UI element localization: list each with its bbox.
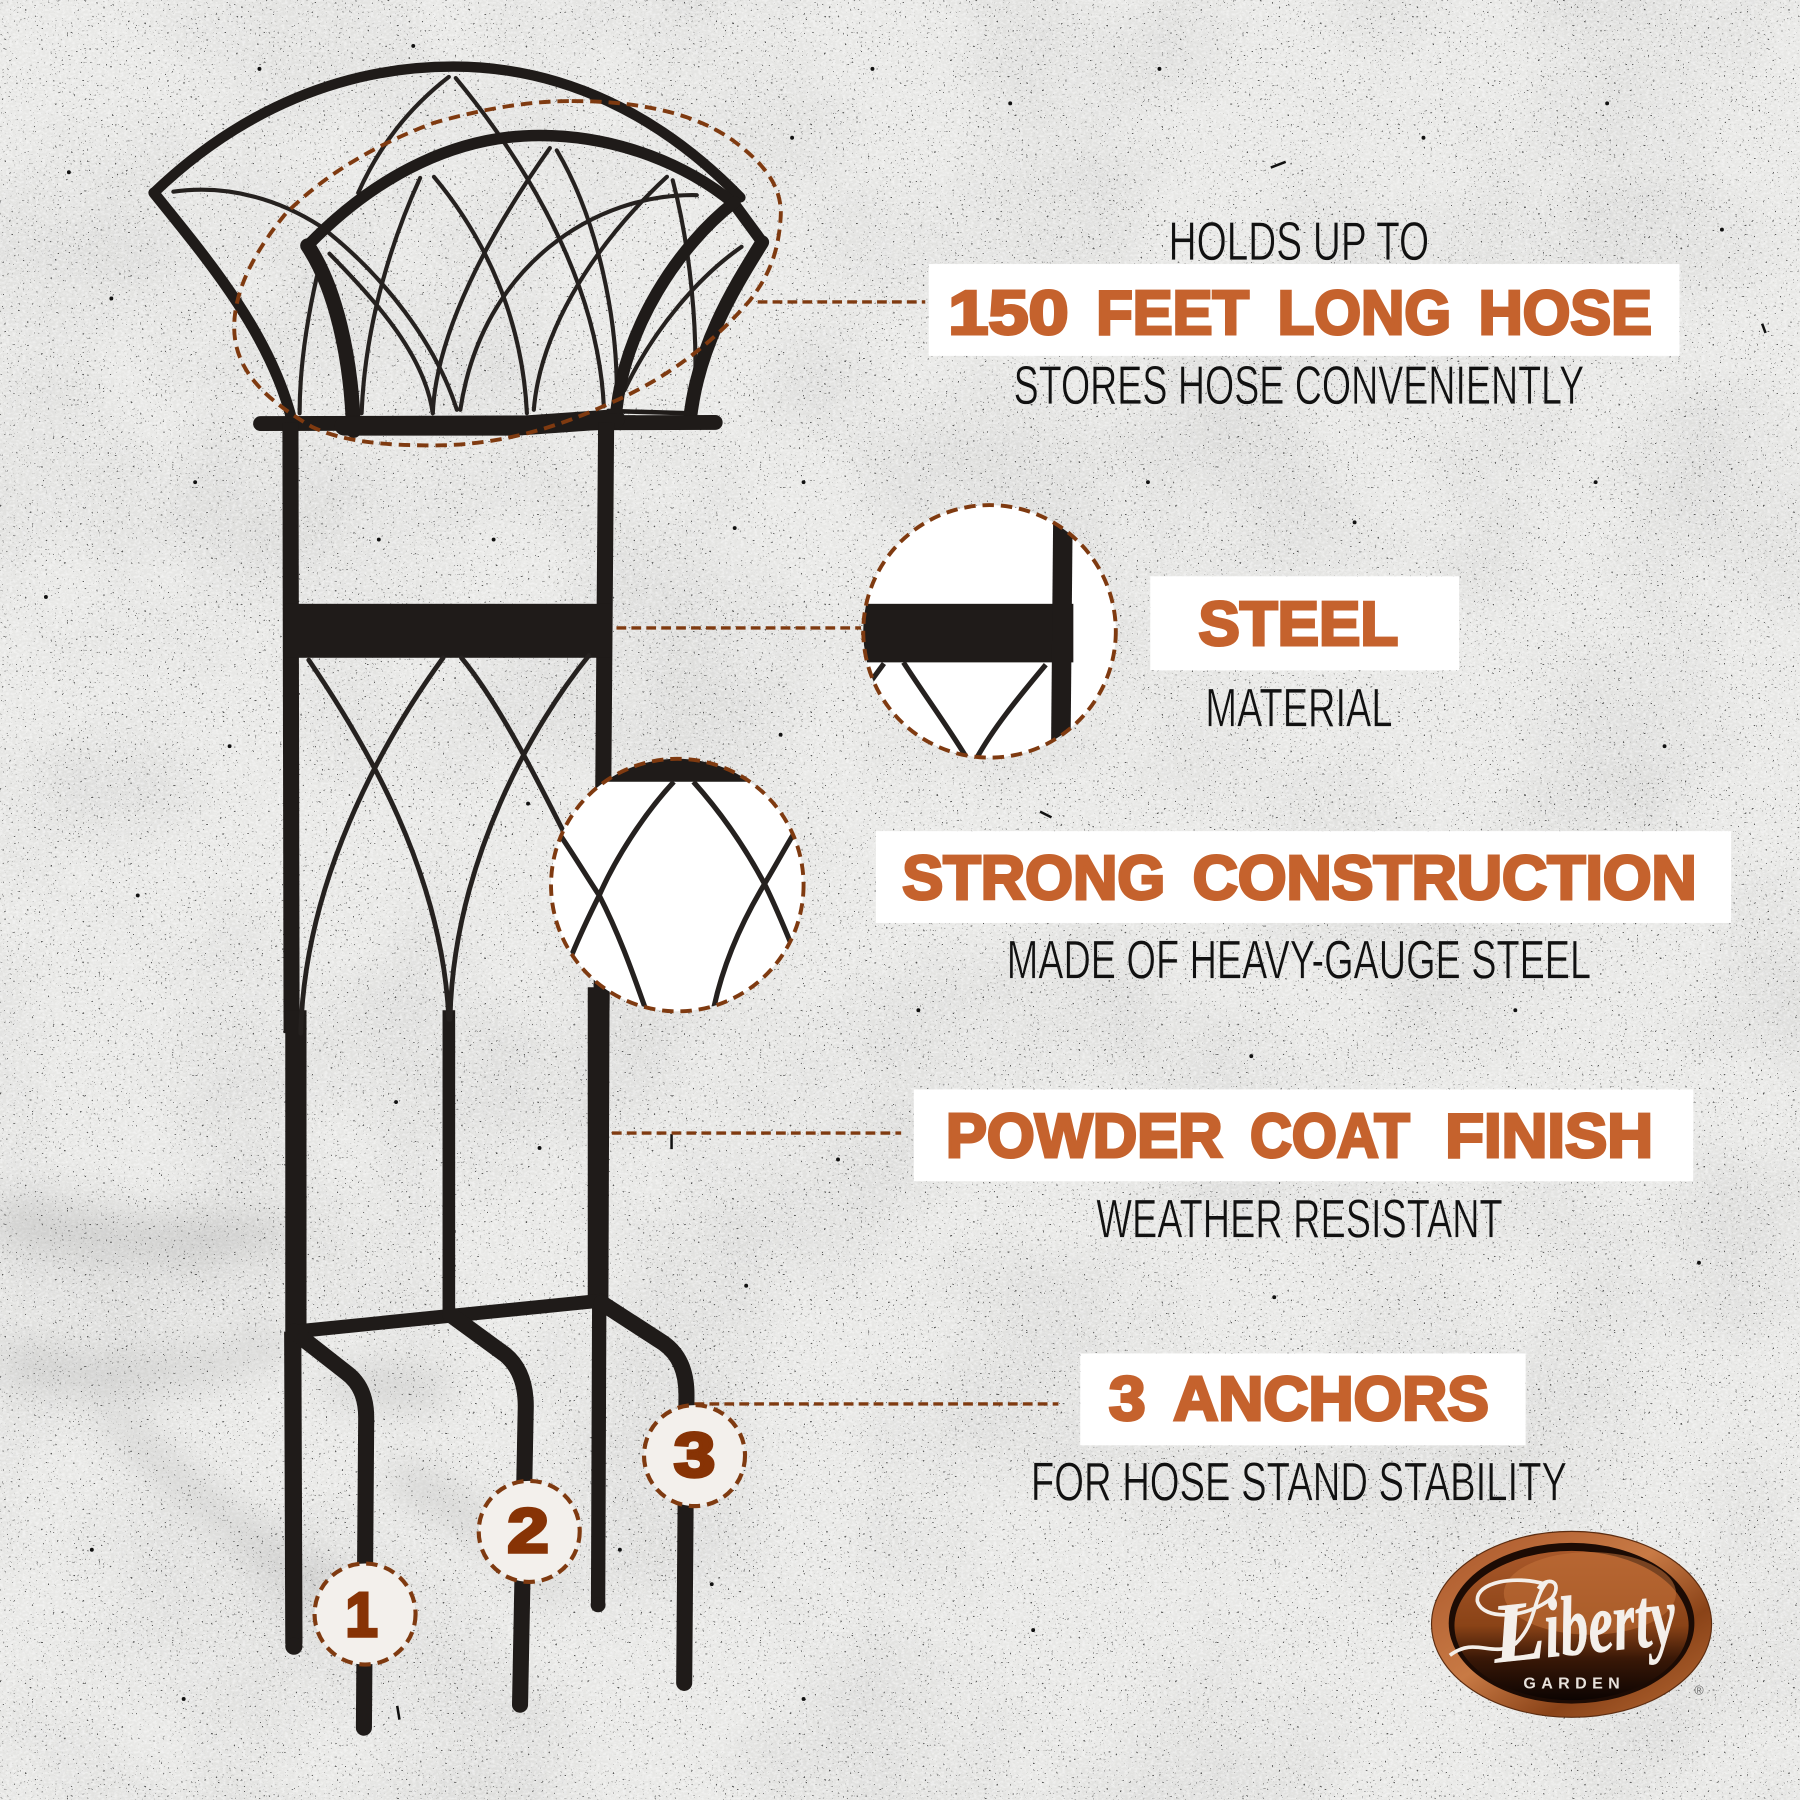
stand: basket frame	[154, 67, 762, 430]
feature: steel material: MATERIAL	[1205, 677, 1392, 739]
feature: strong construction: CONSTRUCTION	[1193, 844, 1697, 913]
anchor badge 3	[644, 1405, 745, 1506]
feature: powder coat finish: FINISH	[1445, 1102, 1653, 1171]
feature: hose capacity: HOSE	[1479, 279, 1652, 348]
feature: hose capacity: LONG	[1278, 279, 1451, 348]
feature: three anchors	[1031, 1353, 1567, 1512]
feature: powder coat finish: COAT	[1250, 1102, 1410, 1171]
stand: post tips	[285, 1597, 606, 1655]
connector: anchor to anchors label	[695, 1402, 1058, 1405]
feature: three anchors: 3	[1109, 1365, 1146, 1434]
logo: Liberty Garden: Liberty	[1486, 1569, 1680, 1682]
anchor badge 3: 3	[674, 1421, 715, 1490]
zoom circle: construction detail	[551, 752, 804, 1011]
stand: rail and anchors	[294, 1301, 686, 1728]
anchor badge 2	[479, 1481, 580, 1582]
feature: steel material	[1150, 576, 1459, 739]
feature: powder coat finish: POWDER	[946, 1102, 1223, 1171]
feature: three anchors: ANCHORS	[1173, 1365, 1489, 1434]
feature: steel material: STEEL	[1198, 590, 1398, 659]
feature: powder coat finish	[914, 1089, 1693, 1250]
logo: Liberty Garden: GARDEN	[1523, 1675, 1620, 1693]
dashed highlight around basket	[234, 101, 781, 445]
connector: post to finish label	[612, 1132, 901, 1135]
hose stand: product illustration	[154, 67, 762, 1728]
feature: hose capacity: FEET	[1096, 279, 1249, 348]
logo: Liberty Garden	[1432, 1531, 1712, 1717]
anchor badge 1: 1	[346, 1581, 378, 1650]
feature: hose capacity: HOLDS UP TO	[1169, 210, 1429, 272]
connector: plate to zoom circle	[616, 626, 861, 629]
feature: hose capacity	[929, 210, 1679, 416]
feature: powder coat finish: WEATHER RESISTANT	[1096, 1188, 1503, 1250]
connector: basket to capacity label	[758, 300, 925, 303]
feature: three anchors: FOR HOSE STAND STABILITY	[1031, 1450, 1567, 1512]
stand: basket head wires	[173, 77, 742, 413]
stand: posts and plate	[285, 422, 612, 1644]
stand: lower lattice	[301, 655, 602, 1033]
feature: strong construction: STRONG	[902, 844, 1165, 913]
anchor badge 2: 2	[507, 1497, 549, 1566]
logo: Liberty Garden: ®	[1694, 1683, 1704, 1697]
anchor badge 1	[315, 1564, 416, 1665]
feature: strong construction	[876, 831, 1731, 991]
feature: hose capacity: 150	[948, 279, 1069, 348]
zoom circle: steel plate detail	[855, 505, 1116, 758]
